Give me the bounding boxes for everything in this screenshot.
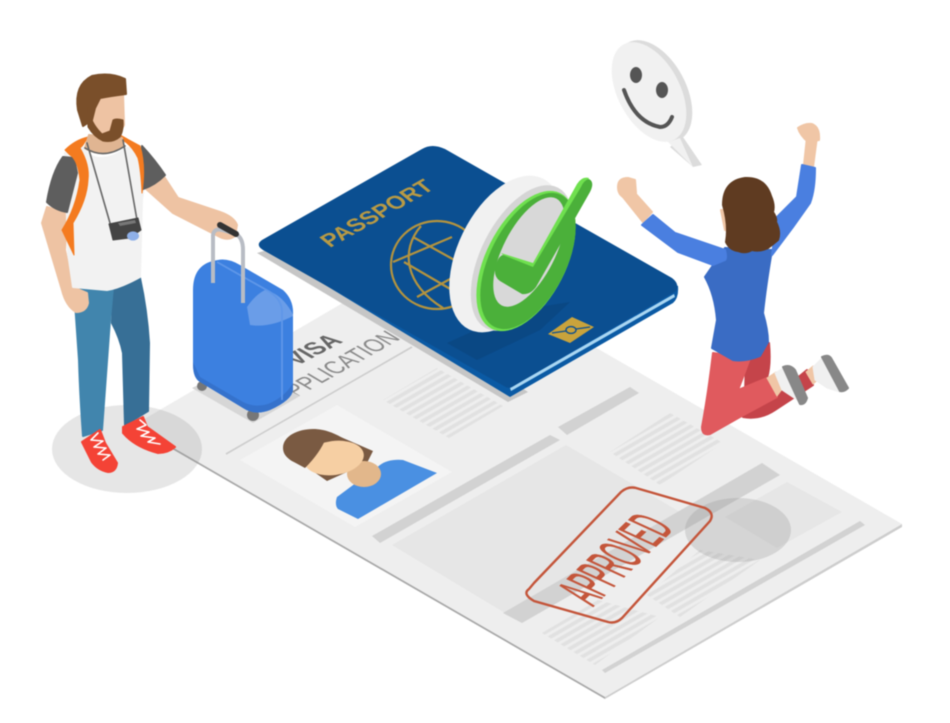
bubble back [600, 27, 708, 155]
man neck [85, 135, 123, 153]
man front leg [74, 287, 113, 436]
photo divider line [226, 347, 412, 454]
man right sleeve [142, 146, 165, 189]
suitcase rib [217, 262, 282, 400]
suitcase handle [213, 230, 243, 303]
portrait neck [347, 461, 381, 487]
form text lines [383, 368, 760, 665]
woman rear leg [741, 343, 813, 418]
check mark [495, 179, 592, 294]
check mark highlight [501, 178, 589, 285]
icon: camera [109, 218, 141, 241]
woman right forearm [804, 137, 817, 167]
speech bubble [596, 27, 708, 167]
panel: visa application paper [134, 252, 902, 699]
woman rear foot [806, 356, 848, 392]
stamp frame [526, 488, 712, 622]
woman front leg [702, 353, 777, 434]
man rear leg [112, 278, 149, 425]
portrait hair [283, 429, 373, 481]
passport front cover [259, 146, 677, 388]
man beard [87, 107, 123, 142]
chip emblem [548, 317, 594, 343]
camera strap [85, 140, 137, 223]
man traveler [42, 75, 237, 472]
man left sleeve [47, 157, 77, 212]
wheels [197, 381, 207, 391]
badge green ring highlight [456, 175, 596, 347]
smile eyes [630, 67, 642, 83]
woman left fist [618, 178, 636, 198]
globe emblem [391, 221, 483, 309]
passport title: PASSPORT [314, 175, 439, 251]
man shirt [65, 147, 144, 290]
badge white rim [426, 157, 586, 351]
icon: check badge [426, 157, 596, 351]
heading: APPLICATION: APPLICATION [265, 327, 406, 407]
woman jumping [618, 124, 848, 434]
passport pages [510, 294, 675, 391]
form bars [372, 387, 865, 673]
portrait shoulders [336, 460, 437, 519]
passport shadow [257, 240, 528, 402]
man left arm [42, 207, 88, 312]
bubble front [596, 30, 702, 154]
approved stamp [526, 488, 791, 622]
woman front foot [767, 366, 807, 404]
badge grey face [450, 169, 594, 347]
suitcase shadow [192, 365, 300, 423]
bubble tail [670, 137, 702, 167]
suitcase bottom shade [193, 362, 293, 413]
large form panel [392, 445, 680, 613]
woman left forearm [623, 193, 652, 222]
man front shoe [82, 430, 117, 472]
woman neck [721, 210, 730, 232]
passport back cover [264, 160, 678, 397]
photo card [240, 405, 452, 527]
badge green ring [461, 178, 595, 344]
woman hair [723, 178, 779, 252]
suitcase [193, 225, 293, 421]
suitcase body [193, 260, 293, 413]
backpack straps [62, 135, 144, 255]
woman left sleeve [642, 215, 726, 265]
man hair [77, 75, 126, 126]
passport [257, 146, 678, 402]
check badge shadow [447, 302, 570, 360]
badge inner hole [479, 187, 579, 317]
handle grip [220, 225, 236, 234]
woman torso [705, 248, 772, 360]
stamp circle [685, 498, 791, 562]
smile mouth [624, 90, 672, 127]
man rear shoe [123, 417, 175, 453]
ground circle below man [52, 405, 202, 493]
small form panel [725, 482, 842, 548]
portrait face [302, 437, 366, 479]
portrait fringe [285, 432, 326, 468]
stamp text: APPROVED [544, 506, 687, 613]
man face [88, 93, 124, 138]
suitcase top light [247, 290, 293, 326]
man right arm [145, 175, 237, 239]
heading: VISA: VISA [278, 330, 349, 369]
woman right fist [798, 124, 819, 142]
woman right sleeve [772, 165, 815, 255]
